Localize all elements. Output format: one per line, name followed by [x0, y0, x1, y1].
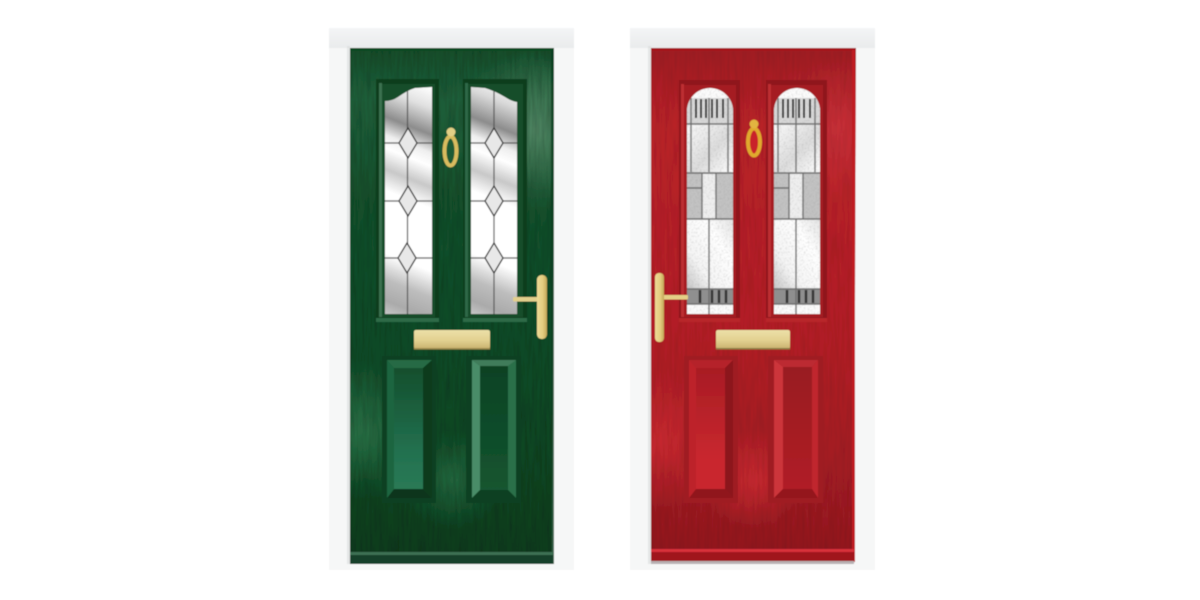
letterbox: green door — [414, 330, 490, 350]
lower panel: green left — [382, 356, 436, 503]
glass pane: red right — [774, 88, 820, 314]
leaded diamonds: green right — [485, 128, 503, 273]
glass pane: red left — [687, 88, 733, 314]
threshold: red door — [651, 549, 854, 564]
door knocker: red door — [748, 120, 760, 156]
lower panel: red right — [768, 356, 823, 503]
leaded diamonds: green left — [398, 128, 417, 273]
leaded lines: red right — [774, 98, 820, 314]
door frame: green door — [329, 28, 574, 570]
threshold: green door — [350, 552, 553, 564]
glass pane: green right — [471, 87, 517, 314]
door knocker: green door — [444, 128, 456, 166]
leaded lines: red left — [687, 98, 733, 314]
lower panel: red left — [684, 356, 738, 503]
glass pane: green left — [385, 87, 432, 314]
green door assembly — [329, 28, 574, 570]
glazing surround: red right — [766, 80, 827, 322]
door frame: red door — [630, 28, 875, 570]
letterbox: red door — [716, 330, 790, 350]
door slab: green — [350, 48, 554, 564]
glazing surround: red left — [679, 80, 740, 322]
door handle: green door — [513, 275, 547, 339]
lower panel: green right — [466, 356, 521, 503]
red door assembly — [630, 28, 875, 570]
door handle: red door — [655, 273, 688, 342]
glazing surround: green right — [463, 79, 527, 322]
glazing surround: green left — [376, 79, 439, 322]
door slab: red — [651, 48, 856, 563]
illustration: two front doors — [329, 28, 875, 570]
